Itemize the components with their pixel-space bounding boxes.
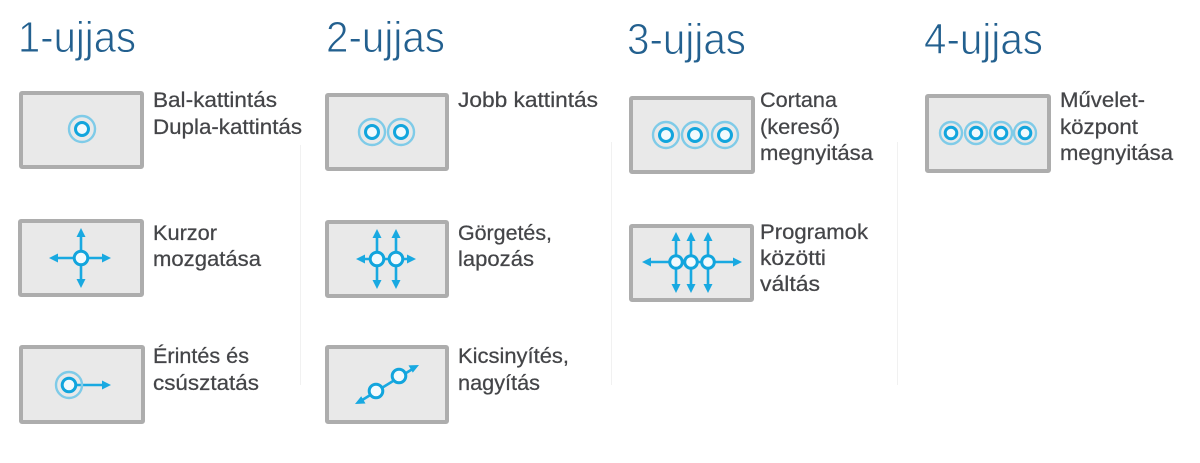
column: 1-ujjas [18,13,302,422]
gesture: switch between programs: Programok [760,220,868,244]
gesture: open action center: központ [1060,115,1138,139]
gesture: move cursor: Kurzor [153,221,217,245]
gesture: scroll, page [327,221,552,296]
gesture: switch between programs: közötti [760,246,826,270]
gesture: right click [327,88,598,169]
gesture: zoom: Kicsinyítés, [458,344,569,368]
gesture: open action center: megnyitása [1060,141,1173,165]
gesture: zoom: nagyítás [458,371,540,395]
gesture: move cursor [20,221,261,295]
gesture: touch and slide: Érintés és [153,343,249,368]
gesture: open Cortana [631,88,873,172]
gesture: open action center [927,88,1173,171]
gesture: scroll, page: Görgetés, [458,221,552,245]
gesture: left click, double click [21,88,302,167]
gesture: scroll, page: lapozás [458,247,534,271]
gesture: switch between programs [631,220,868,300]
gesture: open Cortana: (kereső) [760,115,840,139]
gesture: switch between programs: váltás [760,272,820,296]
gesture: right click: Jobb kattintás [458,88,598,112]
gesture: open Cortana: megnyitása [760,141,873,165]
gesture: open Cortana: Cortana [760,88,837,112]
gesture: left click, double click: Bal-kattintás [153,88,277,112]
title: 3-ujjas: 3-ujjas [627,15,746,64]
gesture: move cursor: mozgatása [153,247,261,271]
gesture: left click, double click: Dupla-kattintás [153,115,302,139]
title: 1-ujjas: 1-ujjas [18,13,136,62]
column: 3-ujjas [627,15,873,300]
gesture: zoom [327,344,569,422]
gesture: open action center: Művelet- [1060,88,1145,112]
column: 2-ujjas [326,13,598,422]
title: 4-ujjas: 4-ujjas [924,15,1043,64]
column: 4-ujjas [924,15,1173,171]
gesture: touch and slide: csúsztatás [153,371,259,395]
gesture: touch and slide [21,343,259,422]
title: 2-ujjas: 2-ujjas [326,13,445,62]
